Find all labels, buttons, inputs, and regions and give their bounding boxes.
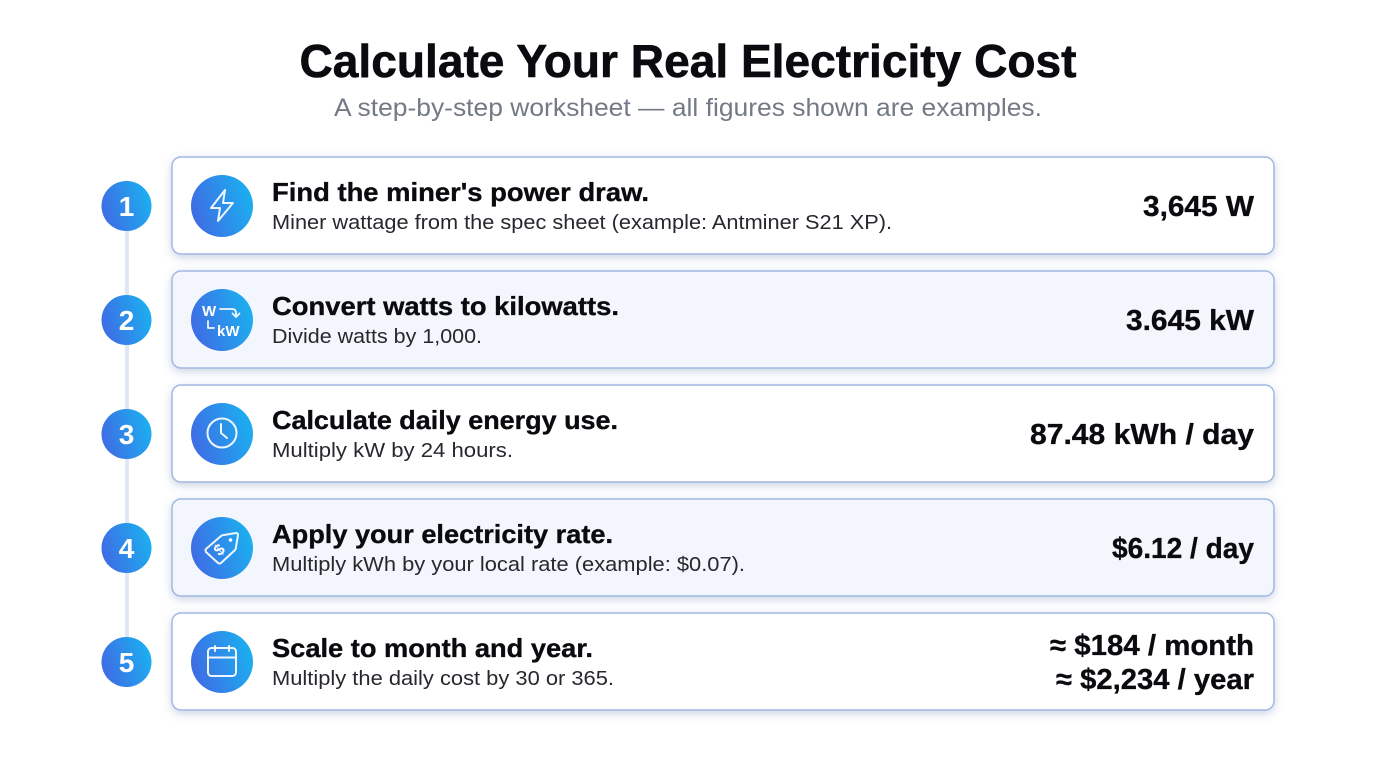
step 2 value: 3.645 kW — [1126, 305, 1255, 337]
step 3 badge — [102, 409, 152, 459]
step 3 icon: clock — [191, 403, 253, 465]
step 4 icon: price tag — [191, 517, 253, 579]
step 4 badge: 4 — [119, 533, 135, 564]
step 1 badge — [102, 181, 152, 231]
step 5 — [102, 613, 1274, 710]
subtitle: A step-by-step worksheet — all figures shown are examples. — [334, 94, 1042, 122]
step 5 badge — [102, 637, 152, 687]
step 4 description: Multiply kWh by your local rate (example: $0.07). — [272, 554, 745, 576]
step 3 description: Multiply kW by 24 hours. — [272, 440, 513, 462]
step 2 card — [172, 271, 1274, 368]
step 3 value: 87.48 kWh / day — [1030, 419, 1254, 451]
step 4 icon: price tag: $ — [211, 541, 229, 560]
step 1 heading: Find the miner's power draw. — [272, 177, 649, 207]
step 3 — [102, 385, 1274, 482]
step 2 icon: watts to kilowatts — [191, 289, 253, 351]
timeline connector — [125, 206, 129, 662]
step 2 description: Divide watts by 1,000. — [272, 326, 482, 348]
step 4 — [102, 499, 1274, 596]
step 2 heading: Convert watts to kilowatts. — [272, 291, 619, 321]
step 5 icon: calendar — [191, 631, 253, 693]
step 3 card — [172, 385, 1274, 482]
step 5 card — [172, 613, 1274, 710]
step 2 badge — [102, 295, 152, 345]
step 5 yearly value: ≈ $2,234 / year — [1056, 664, 1254, 696]
step 1 — [102, 157, 1274, 254]
step 4 value: $6.12 / day — [1112, 533, 1254, 565]
step 5 badge: 5 — [119, 647, 134, 678]
step 1 card — [172, 157, 1274, 254]
step 4 heading: Apply your electricity rate. — [272, 519, 613, 549]
step 3 heading: Calculate daily energy use. — [272, 405, 618, 435]
step 5 description: Multiply the daily cost by 30 or 365. — [272, 668, 614, 690]
step 1 icon: lightning bolt — [191, 175, 253, 237]
step 2 badge: 2 — [119, 305, 134, 336]
step 5 monthly value: ≈ $184 / month — [1050, 630, 1254, 662]
step 2 icon: watts to kilowatts: W — [202, 303, 217, 320]
step 1 value: 3,645 W — [1143, 191, 1255, 223]
step 5 heading: Scale to month and year. — [272, 633, 593, 663]
title: Calculate Your Real Electricity Cost — [300, 35, 1076, 87]
step 4 badge — [102, 523, 152, 573]
step 4 card — [172, 499, 1274, 596]
step 2 — [102, 271, 1274, 368]
step 1 badge: 1 — [119, 191, 134, 222]
step 3 badge: 3 — [119, 419, 134, 450]
step 1 description: Miner wattage from the spec sheet (example: Antminer S21 XP). — [272, 212, 892, 234]
step 2 icon: watts to kilowatts: kW — [217, 323, 240, 340]
